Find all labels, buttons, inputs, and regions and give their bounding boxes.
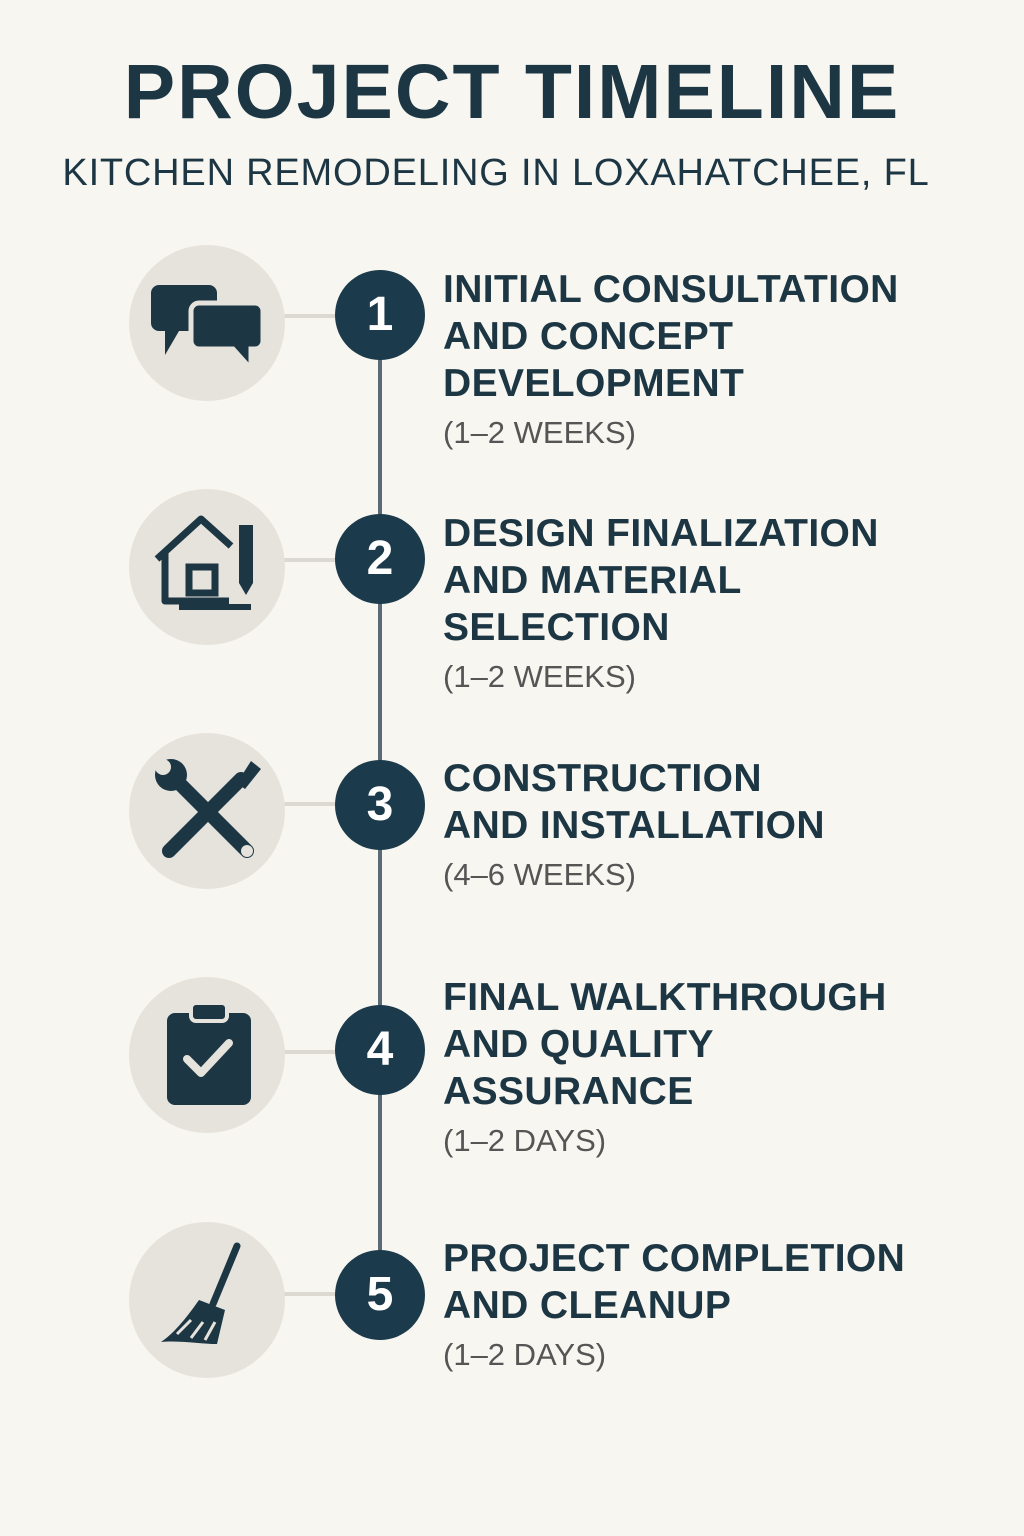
step 4 text: ASSURANCE (443, 1070, 694, 1113)
step 2 text: (1–2 WEEKS) (443, 659, 636, 694)
step 2 text (443, 512, 879, 694)
step 1 text: DEVELOPMENT (443, 362, 744, 405)
step 4 text (443, 976, 887, 1158)
step 5 text: PROJECT COMPLETION (443, 1237, 905, 1280)
step 4 text: AND QUALITY (443, 1023, 714, 1066)
number 5: 5 (367, 1268, 393, 1321)
icon: broom (129, 1222, 285, 1378)
step 4 text: (1–2 DAYS) (443, 1123, 606, 1158)
number 4 (335, 1005, 425, 1095)
connector 1 (280, 314, 340, 318)
number 5 (335, 1250, 425, 1340)
step 4 text: FINAL WALKTHROUGH (443, 976, 887, 1019)
number 3 (335, 760, 425, 850)
connector 4 (280, 1050, 340, 1054)
icon: wrench and screwdriver (129, 733, 285, 889)
number 3: 3 (367, 778, 393, 831)
connector 3 (280, 802, 340, 806)
step 3 text: CONSTRUCTION (443, 757, 762, 800)
step 5 text: (1–2 DAYS) (443, 1337, 606, 1372)
connector 5 (280, 1292, 340, 1296)
step 5 text: AND CLEANUP (443, 1284, 731, 1327)
connector 2 (280, 558, 340, 562)
number 1: 1 (367, 288, 393, 341)
icon: house with pencil (129, 489, 285, 645)
step 3 text (443, 757, 825, 892)
step 3 text: AND INSTALLATION (443, 804, 825, 847)
step 2 text: SELECTION (443, 606, 670, 649)
step 1 text (443, 268, 899, 450)
title: PROJECT TIMELINE (124, 49, 900, 135)
step 2 text: AND MATERIAL (443, 559, 742, 602)
step 1 text: INITIAL CONSULTATION (443, 268, 899, 311)
number 1 (335, 270, 425, 360)
step 1 text: AND CONCEPT (443, 315, 733, 358)
subtitle: KITCHEN REMODELING IN LOXAHATCHEE, FL (62, 152, 930, 194)
timeline vertical line (378, 318, 382, 1295)
icon: clipboard check (129, 977, 285, 1133)
number 2: 2 (367, 532, 393, 585)
number 2 (335, 514, 425, 604)
step 2 text: DESIGN FINALIZATION (443, 512, 879, 555)
step 3 text: (4–6 WEEKS) (443, 857, 636, 892)
icon: chat bubbles (129, 245, 285, 401)
step 1 text: (1–2 WEEKS) (443, 415, 636, 450)
step 5 text (443, 1237, 905, 1372)
number 4: 4 (367, 1023, 393, 1076)
